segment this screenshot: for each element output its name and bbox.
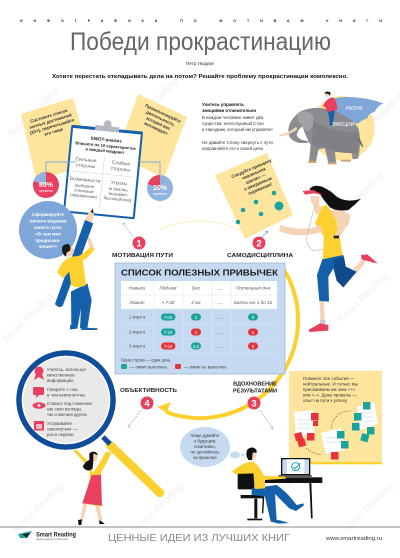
- note: small steps: переменам!: [247, 181, 273, 196]
- watermarks: Smart Reading: [1, 291, 56, 346]
- runner: [279, 186, 378, 332]
- man at desk: [232, 447, 322, 524]
- number 2: 2: [256, 238, 262, 250]
- clipboard: SWOT: [63, 117, 144, 219]
- watermarks: Smart Reading: [11, 481, 66, 536]
- elephant illustration: [279, 91, 383, 164]
- number 1: [132, 236, 146, 250]
- habits table: Баллы от 1 до 10: [234, 300, 273, 305]
- label: objectivity: ОБЪЕКТИВНОСТЬ: [120, 388, 177, 394]
- number 2: [252, 236, 266, 250]
- clipboard: SWOT: в каждый квадрант: [85, 146, 125, 155]
- icon: medal: [34, 366, 44, 380]
- magnifier tips: Говорите о том,: [47, 387, 78, 392]
- bubble: think about future: позитивно,: [194, 444, 216, 449]
- number 1: 1: [136, 238, 142, 250]
- note: analyse activity: Проанализируйте: [144, 103, 182, 124]
- habits table: Подъем: [160, 286, 177, 290]
- pie: 80%: [33, 172, 59, 198]
- habits table: Навыки: [129, 286, 146, 290]
- clipboard: SWOT: беспокойство): [103, 195, 132, 203]
- dashed arrow 1: [123, 223, 133, 237]
- number 3: [248, 396, 260, 410]
- note: small steps: [215, 153, 293, 239]
- header label: ИНФОГРАФИКА ПО МОТИВАМ КНИГИ: [20, 19, 382, 23]
- clipboard: SWOT: Угрозы: [111, 180, 128, 187]
- logo: Smart Reading: [36, 532, 76, 538]
- habits table: Бег: [192, 286, 201, 290]
- panel text: присваиваем им знак «+»: [303, 387, 356, 392]
- panel: neutral events: [289, 371, 382, 464]
- panel text: опыт на пути к успеху: [303, 398, 348, 403]
- logo: [18, 531, 76, 541]
- magnifier tips: качественную: [47, 372, 76, 378]
- author: Петр Людвиг: [186, 61, 215, 67]
- watermarks: Smart Reading: [6, 86, 61, 141]
- bubble: personal vision: своего пути:: [34, 225, 63, 230]
- number 3: 3: [251, 398, 257, 410]
- habits table: ......: [215, 300, 223, 305]
- habits table: Лимит: [128, 300, 145, 305]
- magnifier tips: информацию: [47, 378, 74, 383]
- emotions text: В каждом человеке живет два: [202, 115, 264, 120]
- dashed arrow 4: [128, 408, 143, 427]
- connector lines: [46, 162, 160, 175]
- bubble: think about future: за прошлое: [193, 455, 217, 460]
- bubble: personal vision: чение?»: [39, 244, 58, 249]
- clipboard: SWOT: вызывает: [108, 191, 128, 197]
- magnifier tips: как свои взгляды,: [47, 406, 82, 412]
- dashed arrow 3: [260, 410, 273, 429]
- bubble: think about future: не цепляйтесь: [190, 450, 220, 454]
- emotions text: направляйте его к своей цели: [202, 146, 263, 151]
- habits table: 2: [195, 315, 198, 320]
- clipboard: SWOT: SWOT-анализ: [90, 136, 122, 144]
- label: motivation: МОТИВАЦИЯ ПУТИ: [112, 253, 173, 259]
- number 4: [140, 396, 154, 410]
- habits table: ......: [215, 314, 223, 320]
- yellow ring arrow: [157, 221, 298, 418]
- magnifier tips: Устраивайте: [47, 421, 73, 426]
- habits table: 8: [252, 344, 255, 349]
- bubble: personal vision: [19, 201, 77, 259]
- clipboard: SWOT: направления): [70, 192, 98, 200]
- habits table: 1 марта: [129, 314, 146, 320]
- pie: 20%: времени: [153, 192, 167, 196]
- clipboard: SWOT: (и анализ,: [108, 186, 128, 192]
- clipboard: SWOT: Возможности: [69, 176, 101, 185]
- label: inspiration: [233, 382, 277, 394]
- magnifier tips: самокоучинг —: [47, 426, 78, 432]
- emotions text: эмоциями отличительно: [202, 108, 256, 113]
- clipboard: SWOT: Впишите по 10 характеристик: [75, 140, 137, 151]
- table title: СПИСОК ПОЛЕЗНЫХ ПРИВЫЧЕК: [121, 268, 279, 278]
- magnifier tips: раз в неделю: [47, 432, 74, 437]
- bubble: personal vision: предназна-: [35, 238, 61, 243]
- habits table: 9: [252, 315, 255, 320]
- habits table: 7:00: [164, 315, 173, 320]
- habits table: 2 марта: [129, 330, 146, 334]
- note: small steps: шагов» —: [245, 172, 267, 185]
- habits table: [115, 263, 285, 374]
- watermarks: Smart Reading: [336, 271, 391, 326]
- habits table: 2,5: [193, 344, 200, 349]
- magnifier tips: Ставьте под сомнение: [47, 401, 93, 406]
- watermarks: Smart Reading: [341, 481, 396, 536]
- icon: eye: [32, 402, 46, 409]
- magnifier tips: так и мнения других: [47, 412, 88, 417]
- emotions text: Не давайте Слону свернуть с пути,: [202, 140, 274, 145]
- clipboard: SWOT: Сильные: [75, 156, 97, 164]
- note: achievements: (20+), перечитывайте: [29, 117, 75, 136]
- label: self-discipline: САМОДИСЦИПЛИНА: [227, 253, 293, 259]
- icon: calendar: [34, 421, 44, 430]
- clipboard: SWOT: ключевые: [74, 187, 95, 194]
- bubble: think about future: [180, 427, 244, 467]
- note: achievements: Составьте список: [30, 108, 69, 124]
- label: reason: РАЗУМ: [346, 106, 362, 112]
- magnifier tips: [47, 367, 93, 437]
- title: Победи прокрастинацию: [70, 28, 331, 56]
- note: small steps: Следуйте принципу: [231, 157, 273, 179]
- pie: 20%: 20%: [153, 185, 168, 192]
- footer slogan: ЦЕННЫЕ ИДЕИ ИЗ ЛУЧШИХ КНИГ: [108, 532, 290, 544]
- watermarks: Smart Reading: [131, 481, 186, 536]
- note: achievements: личных достижений: [28, 112, 73, 130]
- pie: 80%: времени: [39, 189, 53, 193]
- panel text: или «–». Даже провалы —: [303, 392, 357, 398]
- habits table: ......: [215, 344, 223, 348]
- watermarks: Smart Reading: [331, 171, 386, 226]
- panel text: [303, 376, 358, 403]
- clipboard: SWOT: стороны: [110, 166, 131, 174]
- label: inspiration: РЕЗУЛЬТАТАМИ: [233, 388, 277, 394]
- label: inspiration: ВДОХНОВЕНИЕ: [233, 382, 277, 388]
- emotions text: и Наездник, который им управляет: [202, 127, 273, 132]
- pie: 20%: [147, 175, 173, 201]
- habits table: 7:20: [164, 330, 173, 335]
- label: emotions: ЭМОЦИИ: [332, 122, 355, 128]
- habits table: Потенциал дня: [236, 286, 270, 290]
- note: analyse activity: деятельность,: [145, 109, 176, 127]
- clipboard: SWOT: (выберите: [74, 182, 96, 189]
- table legend: Одна строка — один день: [121, 358, 170, 362]
- habits table: 7:50: [164, 344, 173, 349]
- magnifier tips: в чем компетентны: [47, 392, 85, 398]
- habits table: 0: [195, 330, 198, 335]
- habits table: ......: [215, 330, 223, 334]
- note: analyse activity: которая вас: [146, 116, 172, 131]
- note: small steps: к ожидаемым: [243, 175, 273, 192]
- note: achievements: [21, 98, 92, 180]
- bubble: think about future: Чаще думайте: [190, 433, 220, 438]
- note: small steps: «маленьких: [241, 166, 267, 181]
- clipboard: SWOT: стороны: [76, 162, 96, 170]
- habits table: ......: [215, 286, 223, 290]
- pie: 80%: 80%: [39, 182, 54, 189]
- habits table: 2 км: [190, 300, 201, 305]
- logo: ценные идеи из лучших книг: [36, 538, 68, 541]
- habits table: 5: [252, 330, 255, 335]
- note: achievements: его чаще: [44, 126, 64, 137]
- magnifier with woman: [19, 353, 160, 525]
- dashed arrow 2: [262, 231, 268, 237]
- footer url: www.smartreading.ru: [326, 536, 382, 542]
- watermarks: Smart Reading: [241, 476, 296, 531]
- subtitle: Хотите перестать откладывать дела на потом? Решайте проблему прокрастинации комплексно.: [52, 73, 349, 80]
- bubble: personal vision: «В чем мое: [35, 232, 61, 236]
- emotions text: [202, 102, 274, 151]
- note: analyse activity: [116, 94, 187, 178]
- bubble: personal vision: Сформируйте: [32, 211, 64, 217]
- bubble: personal vision: личное видение: [29, 218, 67, 224]
- panel text: нейтральные. И только мы: [303, 382, 358, 386]
- table legend: — лимит выполнен,: [130, 364, 168, 370]
- icon: speech 100%: [33, 387, 44, 398]
- magnifier tips: Учитесь, используя: [47, 367, 86, 372]
- number 4: 4: [144, 398, 150, 410]
- emotions text: существа: непослушный Слон: [202, 121, 264, 126]
- emotions text: Учитесь управлять: [202, 102, 244, 107]
- man with pencil: [55, 208, 98, 330]
- watermarks: Smart Reading: [126, 76, 181, 131]
- habits table: 3 марта: [129, 344, 146, 348]
- sticky notes: [294, 402, 378, 460]
- panel text: Помните: все события —: [303, 376, 355, 381]
- table legend: — лимит не выполнен: [184, 364, 226, 370]
- clipboard: SWOT: Слабые: [111, 160, 131, 168]
- bubble: think about future: о будущем,: [194, 438, 216, 444]
- table legend: [121, 358, 226, 370]
- footer line: [0, 526, 400, 528]
- note: analyse activity: мотивирует: [143, 121, 169, 136]
- habits table: < 7:30: [162, 300, 175, 305]
